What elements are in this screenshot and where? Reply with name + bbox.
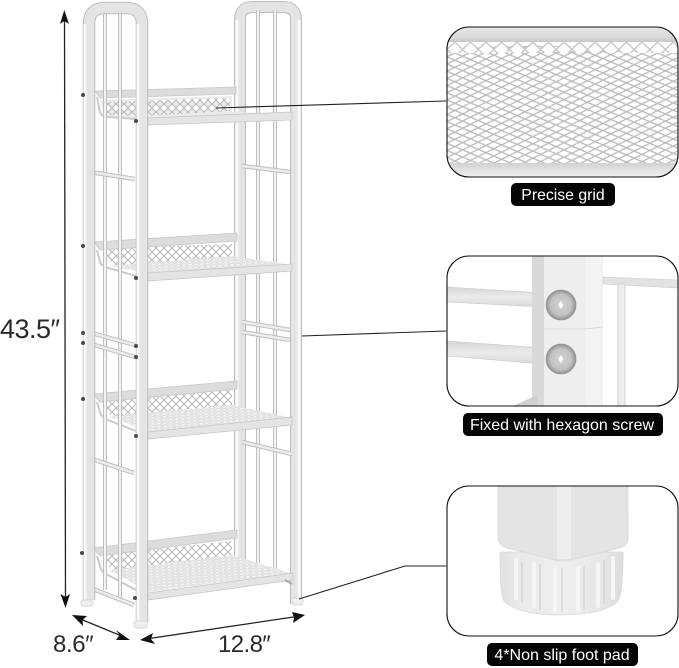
shelf 1 (top)	[95, 87, 292, 125]
arrow: depth dimension	[72, 615, 130, 640]
label: foot pad: 4*Non slip foot pad	[494, 647, 630, 664]
label: foot pad	[487, 643, 638, 666]
arrow: width dimension	[140, 612, 305, 644]
feet of shelf	[81, 598, 303, 628]
shelf 3	[93, 381, 292, 439]
panel: hexagon screw	[447, 256, 678, 406]
callout line: screw	[302, 331, 446, 336]
label: hexagon screw: Fixed with hexagon screw	[470, 417, 654, 434]
label: precise grid: Precise grid	[521, 187, 605, 204]
shelf 4 (bottom)	[93, 530, 293, 600]
height label: 43.5″	[0, 314, 61, 344]
panel: precise grid	[447, 27, 678, 177]
depth label: 8.6″	[53, 631, 94, 658]
width label: 12.8″	[218, 631, 271, 658]
arrow: height dimension	[60, 10, 70, 608]
panel: foot pad	[447, 486, 678, 636]
assembly screws	[80, 93, 138, 600]
label: precise grid	[511, 183, 615, 206]
right end frame of shelf	[237, 7, 299, 604]
label: hexagon screw	[463, 413, 663, 436]
shelf 2	[94, 233, 292, 281]
callout line: foot pad	[299, 566, 446, 599]
left end frame of shelf	[85, 8, 142, 622]
callout line: grid	[216, 101, 446, 108]
